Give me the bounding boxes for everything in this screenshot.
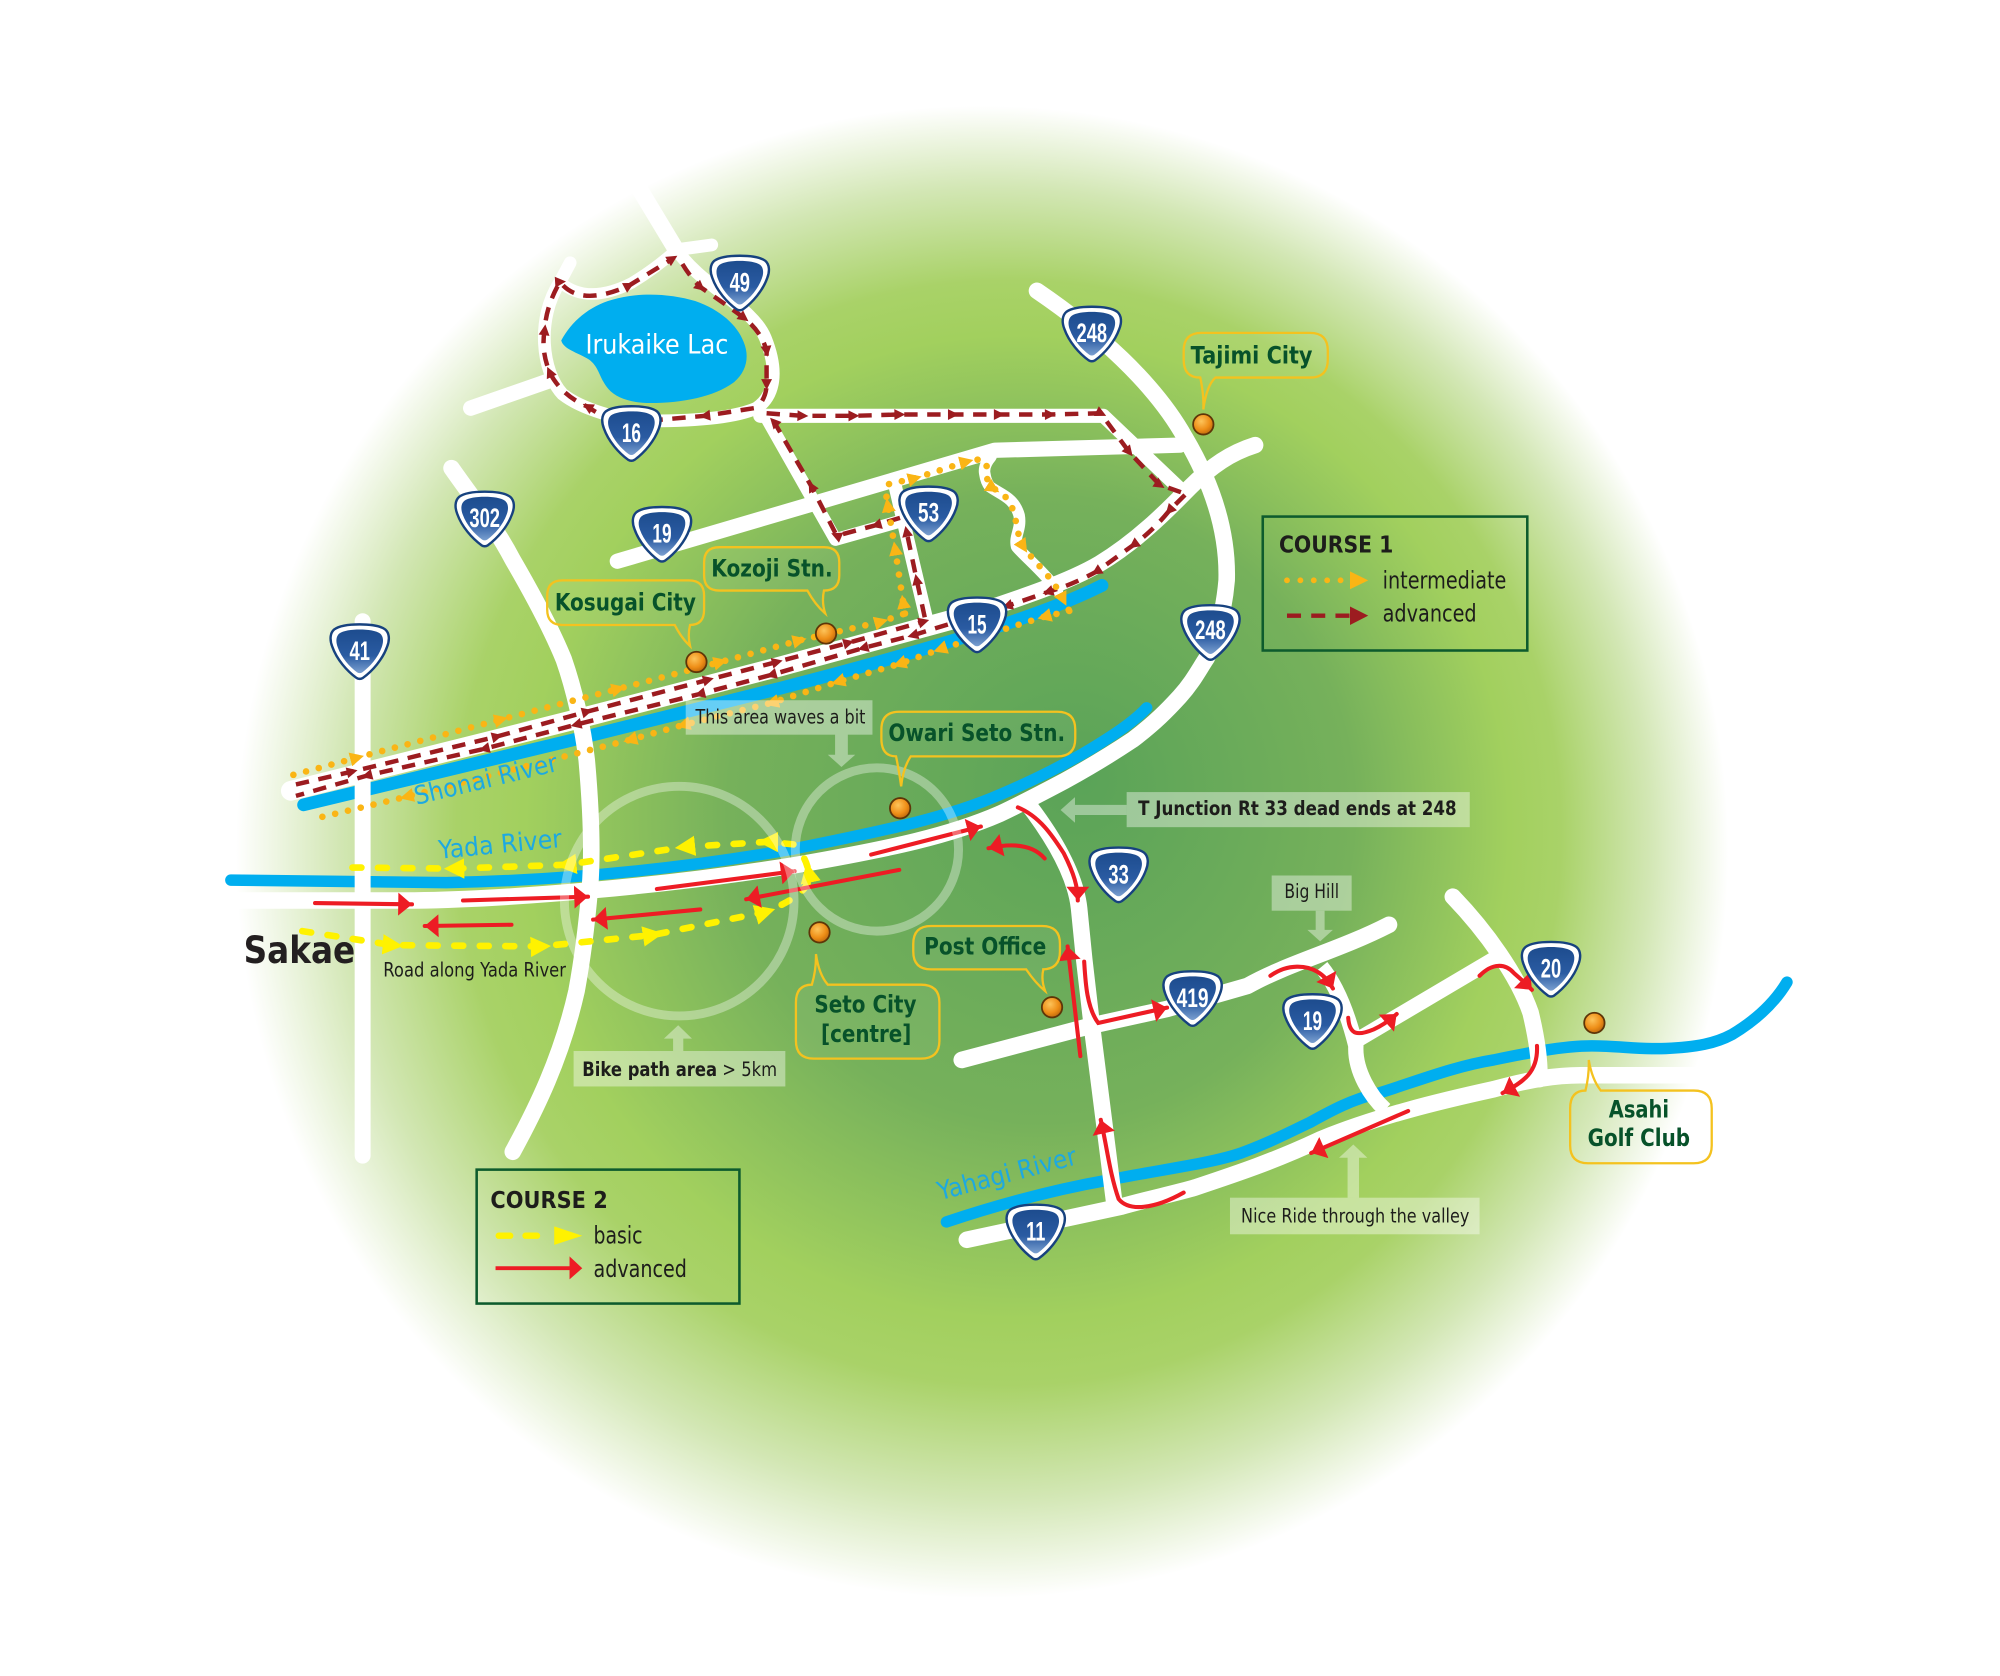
- callout: Kozoji Stn.: [704, 547, 839, 614]
- road 20: [1453, 897, 1540, 1079]
- legend: course 1: COURSE 1: [1279, 532, 1393, 558]
- shield 19 south: 19: [1303, 1006, 1322, 1036]
- course 2 advanced route: [315, 807, 1537, 1207]
- legend: course 1: advanced: [1383, 600, 1477, 628]
- callout: Seto City centre: [centre]: [821, 1020, 911, 1048]
- shield 49: 49: [730, 267, 750, 297]
- annotation: T Junction: [1061, 792, 1470, 827]
- north spurs: [560, 245, 712, 282]
- callout: Seto City centre: [796, 954, 939, 1059]
- shield 33: 33: [1108, 859, 1129, 889]
- label: Irukaike Lac: Irukaike Lac: [585, 329, 728, 360]
- legend: course 2: [477, 1170, 739, 1304]
- bike path area circle: [564, 786, 794, 1016]
- shield 302: 302: [469, 503, 500, 533]
- annotation: This area waves a bit: This area waves a bit: [695, 706, 866, 729]
- annotation: Bike path area: [574, 1025, 785, 1086]
- legend: course 2: COURSE 2: [490, 1188, 608, 1214]
- west spur: [471, 380, 551, 408]
- route shields: [331, 256, 1580, 1259]
- label: Shonai River: Shonai River: [411, 748, 561, 812]
- label: Road along Yada River: Road along Yada River: [383, 958, 567, 981]
- road 19 north: [617, 445, 1180, 561]
- Irukaike lake: [561, 295, 747, 403]
- shield 19 north: 19: [652, 519, 672, 549]
- legend: course 1: intermediate: [1383, 566, 1506, 594]
- callout: Tajimi City: [1184, 333, 1328, 409]
- road 248 and Yada road: [219, 291, 1227, 900]
- shield 11: [1007, 1205, 1065, 1259]
- annotation: Nice Ride: Nice Ride through the valley: [1241, 1205, 1470, 1228]
- shield 15: 15: [967, 609, 987, 639]
- wavy area circle: [795, 768, 959, 931]
- Shonai River line: [304, 585, 1102, 805]
- callout: Seto City centre: Seto City: [814, 991, 917, 1019]
- roads: [219, 180, 1696, 1240]
- callout: Owari Seto Stn.: [881, 712, 1075, 786]
- road 419: [962, 925, 1389, 1060]
- course 1 advanced route: [296, 259, 1185, 796]
- shield 419: 419: [1177, 983, 1209, 1013]
- shield 19 north: [633, 507, 691, 562]
- annotation: This area waves a bit: [686, 700, 872, 767]
- shield 248 south: [1181, 605, 1240, 660]
- shield 302: [456, 492, 514, 546]
- rivers: [231, 295, 1787, 1222]
- label: Sakae: Sakae: [244, 929, 355, 972]
- shield 248 north: 248: [1077, 318, 1107, 348]
- callout: Asahi Golf Club: Asahi: [1609, 1095, 1669, 1123]
- callout: Kosugai City: Kosugai City: [555, 588, 696, 616]
- callout: Tajimi City: Tajimi City: [1191, 342, 1313, 370]
- shield 16: [602, 406, 661, 461]
- Yahagi River line: [946, 982, 1787, 1222]
- Yada River line: [231, 708, 1147, 883]
- shield 19 south: [1283, 994, 1342, 1049]
- label: Yada River: Yada River: [436, 824, 564, 866]
- road 15 wide section: [291, 617, 960, 791]
- shield 248 south: 248: [1195, 615, 1226, 645]
- course 1 intermediate route: [293, 459, 1069, 819]
- annotation: T Junction: T Junction Rt 33 dead ends at 248: [1138, 797, 1457, 820]
- callout: Asahi Golf Club: [1570, 1060, 1712, 1163]
- label: Yahagi River: Yahagi River: [933, 1142, 1080, 1207]
- shield 20: 20: [1541, 954, 1561, 984]
- road 19 south: [1321, 967, 1385, 1110]
- callout: Kozoji Stn.: Kozoji Stn.: [711, 555, 833, 583]
- road 53 link: [893, 478, 927, 620]
- shield 20: [1522, 942, 1580, 996]
- course 2 basic route: [302, 842, 809, 946]
- road 16 east: [760, 416, 1185, 494]
- shield 33: [1089, 848, 1148, 902]
- callout: Post Office: [913, 926, 1060, 991]
- shield 419: [1163, 971, 1222, 1026]
- callout: Post Office: Post Office: [924, 933, 1046, 961]
- shield 53: [899, 487, 958, 541]
- callout: Asahi Golf Club: Golf Club: [1588, 1124, 1690, 1152]
- callout: Kosugai City: [547, 580, 704, 646]
- legend: course 1: [1263, 517, 1527, 651]
- annotation: Nice Ride: [1230, 1145, 1480, 1234]
- annotation: Big Hill: [1272, 875, 1352, 941]
- wavy road: [985, 457, 1057, 591]
- ring road arc: [560, 251, 675, 294]
- shield 41: [331, 624, 389, 679]
- road 49: [634, 180, 675, 247]
- road 15 east section: [950, 445, 1255, 621]
- callout: Owari Seto Stn.: Owari Seto Stn.: [888, 719, 1065, 747]
- road 302: [452, 468, 591, 1152]
- shield 53: 53: [918, 498, 939, 528]
- annotation: Bike path area: Bike path area > 5km: [582, 1058, 777, 1081]
- lake ring road: [544, 247, 773, 421]
- shield 15: [948, 598, 1006, 652]
- shield 11: 11: [1026, 1216, 1045, 1246]
- road 41: [356, 621, 369, 1156]
- shield 16: 16: [622, 418, 641, 448]
- road 11: [967, 1075, 1696, 1240]
- road 33: [1026, 801, 1115, 1207]
- link road: [1356, 954, 1503, 1041]
- location pins: [686, 414, 1605, 1033]
- legend: course 2: advanced: [593, 1255, 687, 1283]
- shield 49: [711, 256, 769, 310]
- shield 248 north: [1063, 307, 1121, 361]
- annotation: Big Hill: Big Hill: [1284, 880, 1339, 903]
- road 53 box: [765, 416, 903, 540]
- legend: course 2: basic: [593, 1222, 642, 1250]
- shield 41: 41: [349, 636, 370, 666]
